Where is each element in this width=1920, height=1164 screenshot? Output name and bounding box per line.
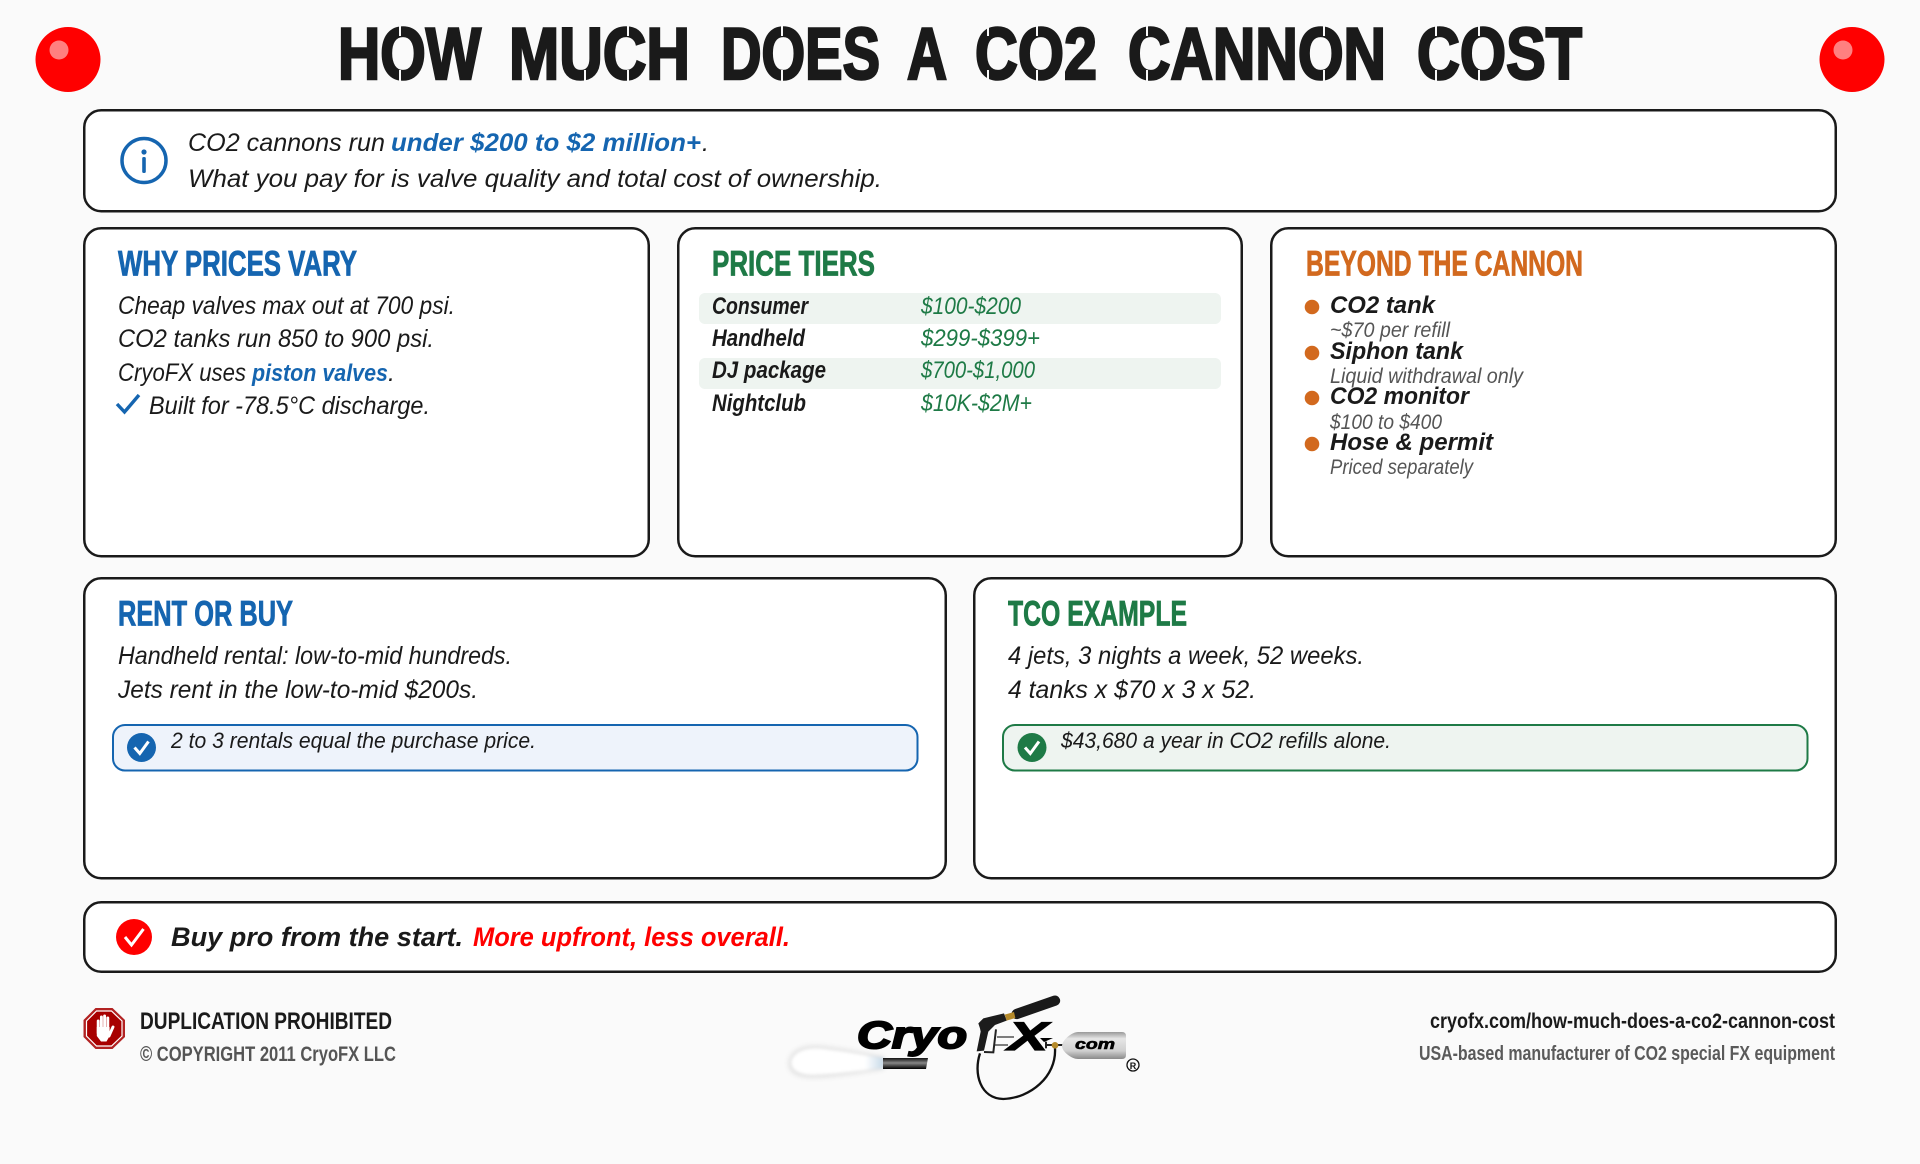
row: handheld: $299-$399+	[920, 325, 1040, 352]
icon: info	[122, 138, 166, 182]
panel: why prices vary	[84, 228, 649, 556]
callout: rentals	[113, 725, 918, 770]
icon: check mark	[117, 395, 139, 412]
footer: copyright	[140, 1008, 396, 1066]
intro text	[188, 129, 882, 193]
item: co2 monitor: CO2 monitor	[1330, 383, 1471, 410]
registered mark: R	[1130, 1061, 1137, 1071]
item: co2 tank: CO2 tank	[1330, 292, 1437, 319]
title: CO2	[975, 14, 1097, 95]
title	[338, 14, 1582, 95]
row: consumer: Consumer	[712, 293, 809, 320]
row: dj package: DJ package	[712, 357, 826, 384]
bottom line text: More upfront, less overall.	[473, 922, 790, 952]
bottom line text	[171, 922, 790, 952]
row: consumer	[699, 293, 1221, 324]
row: handheld: Handheld	[712, 325, 806, 352]
item: siphon tank: Liquid withdrawal only	[1330, 365, 1524, 388]
body text: CO2 tanks run 850 to 900 psi.	[118, 325, 434, 353]
item: hose and permit: Priced separately	[1330, 456, 1474, 479]
body text: CryoFX uses	[118, 359, 246, 387]
item: siphon tank: Siphon tank	[1330, 338, 1465, 365]
body text: Handheld rental: low-to-mid hundreds.	[118, 642, 512, 670]
item: hose and permit	[1305, 429, 1494, 479]
panel: rent or buy	[84, 578, 946, 878]
icon: check badge	[127, 733, 156, 762]
item: co2 monitor: $100 to $400	[1329, 411, 1442, 434]
panel: beyond the cannon	[1271, 228, 1836, 556]
body text	[1008, 642, 1364, 704]
title: A	[907, 14, 947, 95]
footer: copyright: DUPLICATION PROHIBITED	[140, 1008, 392, 1035]
icon: red check badge	[116, 919, 152, 955]
nozzle	[883, 1058, 928, 1069]
callout text: 2 to 3 rentals equal the purchase price.	[170, 728, 536, 753]
heading: TCO EXAMPLE	[1008, 594, 1187, 634]
row: dj package	[699, 357, 1221, 389]
footer: url and tagline: cryofx.com/how-much-does-a-co2-cannon-cost	[1430, 1010, 1835, 1033]
title: HOW	[338, 14, 481, 95]
row: nightclub	[712, 390, 1032, 417]
footer: url and tagline	[1419, 1010, 1835, 1065]
intro text: What you pay for is valve quality and total cost of ownership.	[188, 165, 882, 193]
body text: .	[388, 359, 395, 387]
logo wordmark	[857, 1015, 1053, 1059]
intro text: under $200 to $2 million+	[391, 129, 701, 157]
title: CANNON	[1128, 14, 1386, 95]
callout: refills	[1003, 725, 1808, 770]
item: co2 tank: ~$70 per refill	[1330, 319, 1451, 342]
panel: intro callout	[84, 110, 1836, 211]
intro text: CO2 cannons run	[188, 129, 385, 157]
panel: bottom line	[84, 902, 1836, 972]
item: hose and permit: Hose & permit	[1330, 429, 1494, 456]
heading: RENT OR BUY	[118, 594, 293, 634]
tank: com	[1075, 1036, 1115, 1053]
heading: BEYOND THE CANNON	[1306, 244, 1583, 284]
logo: CryoFX	[789, 1001, 1139, 1099]
row: handheld	[712, 325, 1040, 352]
item: co2 monitor	[1305, 383, 1471, 434]
row: consumer: $100-$200	[920, 293, 1022, 320]
icon: stop hand	[84, 1008, 125, 1049]
logo wordmark: Cryo	[857, 1015, 967, 1057]
icon: left red dot	[36, 27, 100, 92]
item: co2 tank	[1305, 292, 1451, 342]
body text	[117, 642, 512, 704]
body text	[118, 292, 455, 420]
body text: 4 tanks x $70 x 3 x 52.	[1008, 676, 1256, 704]
intro text: .	[702, 129, 709, 157]
row: nightclub: $10K-$2M+	[920, 390, 1032, 417]
title: DOES	[721, 14, 880, 95]
body text: 4 jets, 3 nights a week, 52 weeks.	[1008, 642, 1364, 670]
logo wordmark: X	[1005, 1015, 1051, 1059]
body text: Built for -78.5°C discharge.	[149, 392, 430, 420]
body text: Cheap valves max out at 700 psi.	[118, 292, 455, 320]
tank	[1062, 1032, 1126, 1059]
registered mark	[1127, 1059, 1139, 1071]
cannon and hose	[977, 1001, 1064, 1099]
heading: WHY PRICES VARY	[118, 244, 357, 284]
panel: price tiers	[678, 228, 1242, 556]
title: MUCH	[509, 14, 690, 95]
item: siphon tank	[1305, 338, 1524, 388]
row: dj package: $700-$1,000	[920, 357, 1036, 384]
icon: right red dot	[1820, 27, 1884, 92]
row: nightclub: Nightclub	[712, 390, 806, 417]
callout text: $43,680 a year in CO2 refills alone.	[1060, 728, 1391, 753]
bottom line text: Buy pro from the start.	[171, 922, 463, 952]
heading: PRICE TIERS	[712, 244, 875, 284]
body text: Jets rent in the low-to-mid $200s.	[117, 676, 478, 704]
title: COST	[1417, 14, 1582, 95]
footer: copyright: © COPYRIGHT 2011 CryoFX LLC	[140, 1043, 396, 1066]
fog cloud	[789, 1046, 884, 1077]
body text: piston valves	[251, 360, 388, 387]
panel: tco example	[974, 578, 1836, 878]
icon: check badge	[1018, 733, 1046, 762]
